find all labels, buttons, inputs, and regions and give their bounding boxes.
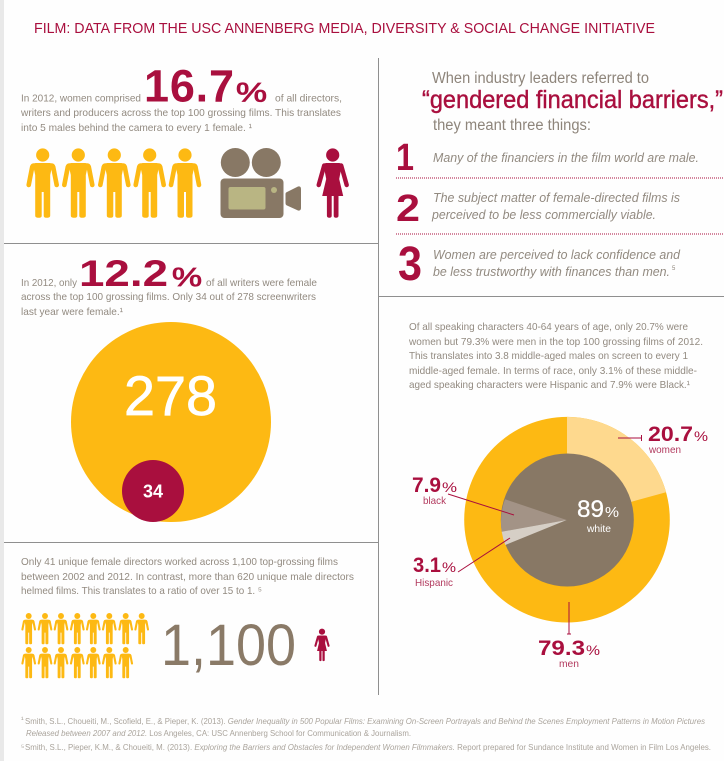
item 2: 2 xyxy=(396,188,420,230)
chart: 34 circle: 34 xyxy=(143,482,163,502)
panel: writers xyxy=(21,253,317,522)
text block: speaking characters: middle-aged female. In terms of race, only 3.1% of these middle- xyxy=(409,365,697,377)
label: 89% white: % xyxy=(605,504,619,521)
callout: 7.9% black: % xyxy=(442,479,457,495)
callout: 3.1% Hispanic xyxy=(413,538,510,589)
chart: 278 circle xyxy=(71,322,271,522)
heading: When industry leaders referred to xyxy=(432,70,649,87)
item 2: The subject matter of female-directed films is xyxy=(433,190,680,205)
item 1 xyxy=(396,137,699,179)
text block: directors: helmed films. This translates to a ratio of over 15 to 1. ⁵ xyxy=(21,585,262,597)
label: 89% white xyxy=(577,496,619,535)
callout: 3.1% Hispanic: % xyxy=(442,559,456,575)
text block: 16.7% statistic: % xyxy=(236,78,267,108)
item 3 xyxy=(398,238,681,291)
icon: small female figure xyxy=(315,629,329,661)
text block: 12.2% statistic: In 2012, only xyxy=(21,277,78,289)
callout: 20.7% women xyxy=(618,423,708,456)
text block: speaking characters: This translates into 3.8 middle-aged males on screen to every 1 xyxy=(409,350,688,362)
item 1: Many of the financiers in the film world are male. xyxy=(433,150,699,165)
callout: 7.9% black xyxy=(412,474,514,515)
text block: 16.7% statistic: into 5 males behind the camera to every 1 female. ¹ xyxy=(21,122,252,134)
text block: 12.2% statistic: % xyxy=(172,262,202,292)
text block: directors: Only 41 unique female directors worked across 1,100 top-grossing films xyxy=(21,556,338,568)
panel: gendered financial barriers xyxy=(396,70,724,291)
text block: 16.7% statistic: of all directors, xyxy=(275,92,342,104)
callout: 79.3% men: 79.3 xyxy=(538,637,585,660)
text block: 12.2% statistic xyxy=(21,253,317,318)
callout: 79.3% men xyxy=(538,602,600,670)
callout: 79.3% men: % xyxy=(586,642,600,658)
text block: speaking characters: women but 79.3% were men in the top 100 grossing films of 2012. xyxy=(408,336,703,348)
item 3: be less trustworthy with finances than men. xyxy=(433,264,670,279)
label: 89% white: 89 xyxy=(577,496,604,523)
panel: directors ratio xyxy=(21,556,354,678)
callout: 20.7% women: 20.7 xyxy=(648,423,693,446)
text block: speaking characters: aged speaking characters were Hispanic and 7.9% were Black.¹ xyxy=(409,379,690,391)
callout: 7.9% black: black xyxy=(423,495,447,507)
text block: 12.2% statistic: across the top 100 grossing films. Only 34 out of 278 screenwriters xyxy=(21,291,316,303)
callout: 3.1% Hispanic: Hispanic xyxy=(415,577,453,589)
footnotes: ⁵ xyxy=(21,743,24,752)
text block: speaking characters xyxy=(408,321,703,391)
chart: 278 circle: 278 xyxy=(124,364,217,427)
item 3: 5 xyxy=(672,266,676,272)
text block: directors: between 2002 and 2012. In contrast, more than 620 unique male directors xyxy=(21,571,354,583)
item 3: 3 xyxy=(398,238,422,291)
big number: 1,100: 1,100 xyxy=(161,613,296,678)
footnotes: Released between 2007 and 2012. Los Angeles, CA: USC Annenberg School for Communication & Journalism. xyxy=(26,729,411,738)
heading xyxy=(422,70,723,134)
item 2: perceived to be less commercially viable. xyxy=(431,207,656,222)
chart: donut gender and race xyxy=(464,417,670,622)
text block: 16.7% statistic: writers and producers across the top 100 grossing films. This translates xyxy=(20,107,341,119)
footnotes xyxy=(21,715,711,752)
callout: 20.7% women: % xyxy=(694,428,708,444)
icon: five male figures xyxy=(29,148,199,218)
text block: speaking characters: Of all speaking characters 40-64 years of age, only 20.7% were xyxy=(409,321,688,333)
callout: 7.9% black: 7.9 xyxy=(412,474,441,497)
icon: film camera xyxy=(220,148,301,218)
panel: middle-aged characters xyxy=(408,321,708,670)
callout: 79.3% men: men xyxy=(559,658,579,670)
title: FILM: DATA FROM THE USC ANNENBERG MEDIA, DIVERSITY & SOCIAL CHANGE INITIATIVE xyxy=(34,20,655,37)
text block: 16.7% statistic: In 2012, women comprised xyxy=(21,92,141,104)
text block: directors xyxy=(21,556,354,597)
item 1: 1 xyxy=(396,137,414,179)
text block: 12.2% statistic: of all writers were female xyxy=(206,277,317,289)
item 2 xyxy=(396,188,680,230)
icon: female figure xyxy=(319,148,347,218)
text block: 12.2% statistic: last year were female.¹ xyxy=(21,306,123,318)
icon: rows of male figures xyxy=(22,613,148,678)
item 3: Women are perceived to lack confidence and xyxy=(433,247,681,262)
footnotes: Smith, S.L., Pieper, K.M., & Choueiti, M. (2013). Exploring the Barriers and Obstacles for Independent Women Filmmakers. Report prepared for Sundance Institute and Women in Film Los Angeles. xyxy=(25,743,711,752)
text block: 16.7% statistic: 16.7 xyxy=(144,60,234,112)
callout: 20.7% women: women xyxy=(648,444,681,456)
label: 89% white: white xyxy=(586,523,611,535)
panel: directors, writers and producers xyxy=(20,60,347,218)
heading: they meant three things: xyxy=(433,117,591,134)
footnotes: ¹ xyxy=(21,715,24,724)
text block: 12.2% statistic: 12.2 xyxy=(79,253,168,294)
footnotes: Smith, S.L., Choueiti, M., Scofield, E., & Pieper, K. (2013). Gender Inequality in 500 Popular Films: Examining On-Screen Portrayals and Behind the Scenes Employment Patterns in Motion Pictures xyxy=(25,717,705,726)
callout: 3.1% Hispanic: 3.1 xyxy=(413,554,441,577)
text block: 16.7% statistic xyxy=(20,60,342,134)
chart: 34 circle xyxy=(122,460,184,522)
